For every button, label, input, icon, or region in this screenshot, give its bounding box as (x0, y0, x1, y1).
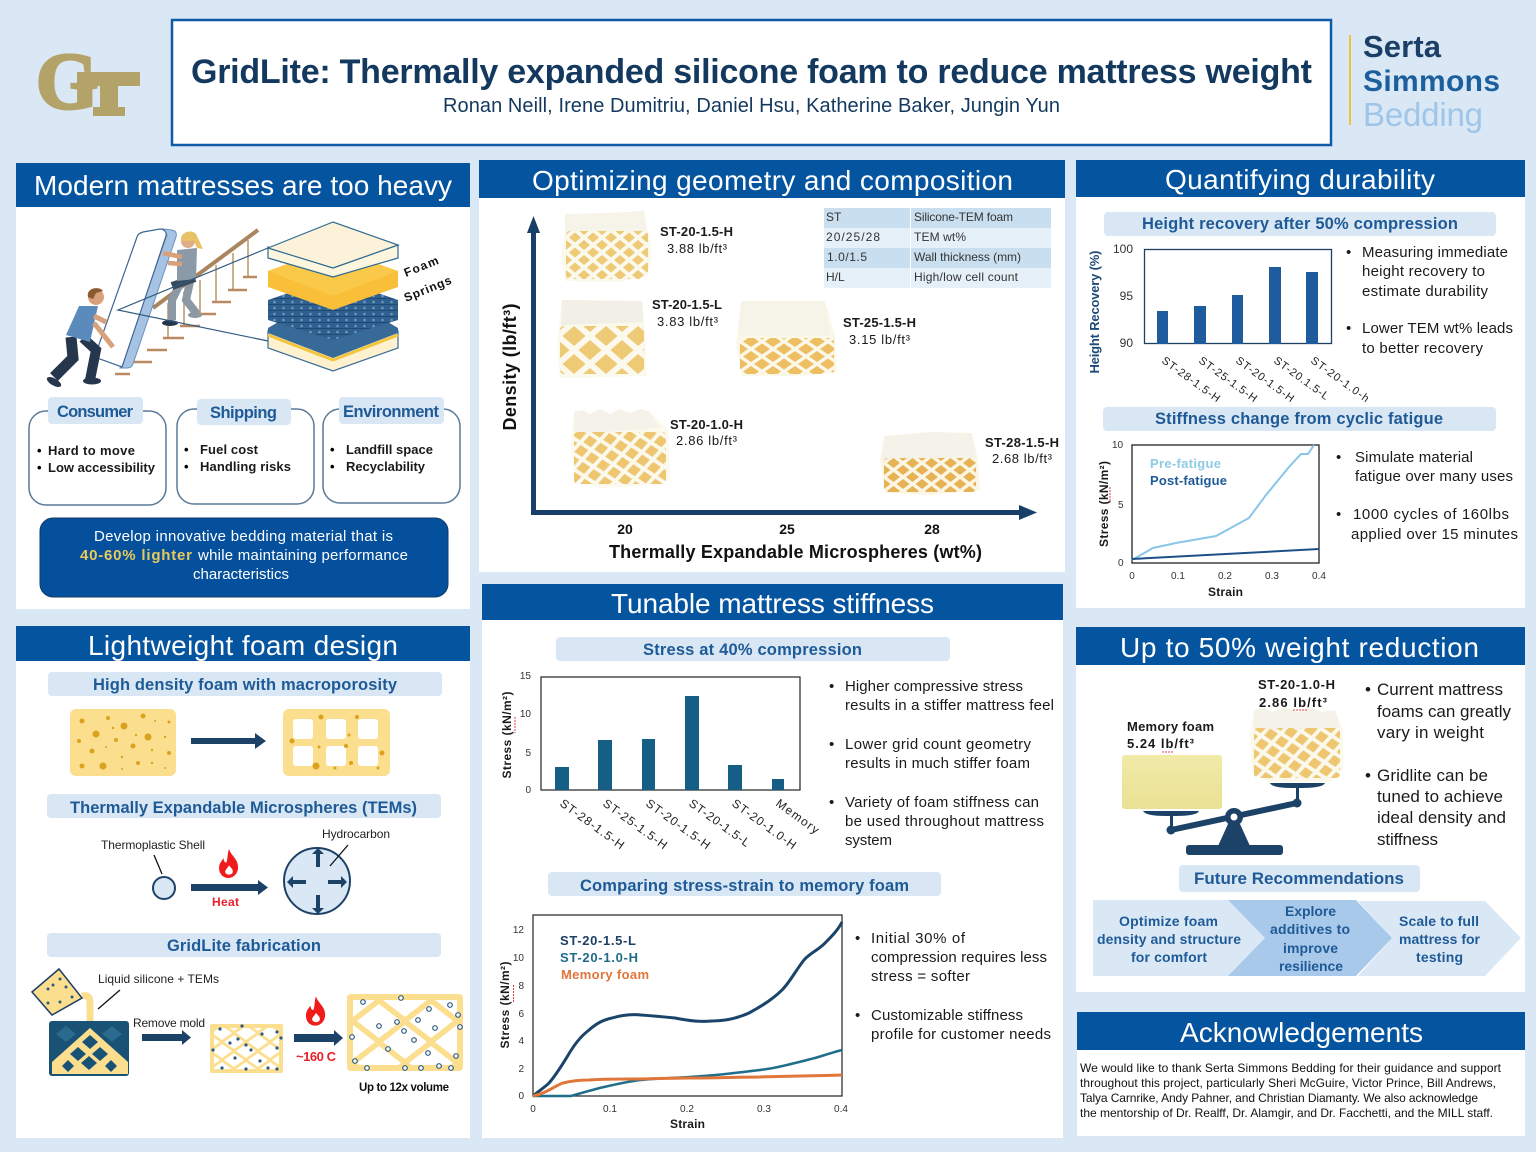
bar chart: stress at 40% compression: ST-20-1.5-H (643, 796, 713, 852)
text: height recovery notes: • (1346, 244, 1351, 261)
line chart: stress-strain: 0 (530, 1104, 536, 1115)
line chart: cyclic fatigue: 0 (1129, 571, 1135, 582)
line chart: stress-strain: 6 (518, 1009, 524, 1020)
text: thanks: We would like to thank Serta Simmons Bedding for their guidance and support (1080, 1061, 1502, 1075)
card: Environment (323, 397, 460, 503)
diagram: microsphere expansion: Thermoplastic Shell (101, 838, 205, 852)
card: Consumer: Low accessibility (48, 460, 156, 475)
text: stress notes: • (829, 794, 834, 811)
sample: ST-20-1.5-H: ST-20-1.5-H (660, 224, 733, 239)
subheading: stress: Stress at 40% compression (643, 641, 862, 659)
line chart: cyclic fatigue: 5 (1118, 500, 1124, 511)
card: Consumer: • (37, 443, 42, 458)
text: cyclic fatigue notes: • (1336, 506, 1341, 523)
card: Shipping: Fuel cost (200, 442, 259, 457)
text: cyclic fatigue notes: fatigue over many uses (1355, 468, 1513, 485)
heading: Lightweight foam design (88, 630, 398, 661)
subheading: cyclic fatigue (1103, 407, 1496, 431)
text: stress-strain notes: profile for customer needs (871, 1026, 1051, 1043)
text: stress notes: • (829, 678, 834, 695)
x axis ticks (617, 521, 940, 537)
bar chart: stress at 40% compression: 5 (525, 748, 531, 759)
sample: ST-28-1.5-H (880, 432, 1059, 495)
line chart: stress-strain: 4 (518, 1036, 524, 1047)
line chart: stress-strain: 10 (513, 953, 524, 964)
diagram: fabrication process: Up to 12x volume (359, 1082, 449, 1094)
step 2: improve (1283, 940, 1338, 956)
text: cyclic fatigue notes: • (1336, 449, 1341, 466)
subheading: stress (556, 637, 950, 661)
sample: ST-20-1.5-L (557, 297, 722, 378)
bar chart: height recovery: 100 (1113, 242, 1133, 256)
card: Shipping: Handling risks (200, 459, 291, 474)
line chart: cyclic fatigue: Post-fatigue (1150, 473, 1227, 488)
line chart: stress-strain: Stress (kN/m²) (498, 962, 512, 1048)
line chart: stress-strain: 12 (513, 925, 524, 936)
step 1: density and structure (1097, 931, 1241, 947)
line chart: cyclic fatigue (1097, 440, 1326, 599)
text: weight notes: vary in weight (1377, 723, 1484, 742)
subheading: TEMs (47, 794, 441, 818)
text: stress notes (829, 678, 1054, 849)
step 3: testing (1416, 949, 1463, 965)
diagram: macroporous foam block (283, 709, 390, 776)
panel: Modern mattresses are too heavy (16, 163, 470, 609)
step 1: Optimize foam (1119, 913, 1218, 929)
table: naming legend: High/low cell count (914, 270, 1019, 284)
subheading: fabrication: GridLite fabrication (167, 937, 321, 955)
card: Environment: • (330, 459, 335, 474)
x axis ticks: 25 (779, 521, 795, 537)
callout: goal (40, 518, 448, 597)
text: weight notes (1365, 680, 1512, 849)
line chart: cyclic fatigue: 0.1 (1171, 571, 1185, 582)
sample: ST-25-1.5-H: ST-25-1.5-H (843, 315, 916, 330)
diagram: balance scale comparison (1122, 677, 1343, 855)
logo: Georgia Tech: G (36, 38, 98, 126)
panel: Tunable mattress stiffness (482, 584, 1063, 1138)
card: Consumer: Hard to move (48, 443, 135, 458)
bar chart: height recovery: ST-20-1.0-h (1308, 355, 1371, 405)
text: stress notes: • (829, 736, 834, 753)
arrow (191, 733, 266, 749)
sample: ST-28-1.5-H: 2.68 lb/ft³ (992, 451, 1053, 466)
panel: Quantifying durability (1076, 160, 1525, 608)
step 1 (1093, 900, 1265, 976)
memory foam block (1122, 755, 1222, 809)
logo: Serta Simmons Bedding: Simmons (1363, 65, 1500, 98)
text: thanks: throughout this project, particularly Sheri McGuire, Victor Prince, Bill Andrews, (1080, 1076, 1496, 1090)
chart axes (527, 216, 1037, 520)
line chart: stress-strain: Strain (670, 1117, 705, 1131)
subheading: macroporosity: High density foam with macroporosity (93, 676, 398, 694)
diagram: balance scale comparison: ST-20-1.0-H (1258, 677, 1335, 692)
bar chart: stress at 40% compression: ST-25-1.5-H (600, 796, 670, 852)
text: stress-strain notes: • (855, 930, 860, 947)
callout: goal: 40-60% lighter (80, 547, 192, 564)
process chevrons (1093, 900, 1521, 976)
woman (162, 232, 203, 326)
woman's arms (163, 253, 182, 264)
bar chart: height recovery: ST-20.1.5-L (1271, 355, 1331, 403)
y axis label: Density (lb/ft³) (500, 304, 520, 430)
diagram: fabrication process: Remove mold (133, 1016, 205, 1030)
subheading: future recommendations: Future Recommendations (1194, 869, 1404, 888)
step 2: additives to (1270, 921, 1350, 937)
line chart: cyclic fatigue: 0 (1118, 558, 1124, 569)
text: height recovery notes: height recovery to (1362, 263, 1485, 280)
text: stress notes: results in a stiffer mattress feel (845, 697, 1054, 714)
subheading: fabrication (47, 933, 441, 957)
step 3 (1358, 901, 1521, 976)
subheading: macroporosity (48, 672, 442, 696)
line chart: cyclic fatigue: 0.2 (1218, 571, 1232, 582)
man (45, 288, 113, 389)
card: Environment: Environment (343, 403, 440, 421)
bar chart: height recovery: ST-20-1.5-H (1233, 355, 1296, 405)
step 2: resilience (1279, 958, 1343, 974)
diagram: microsphere expansion (101, 827, 390, 914)
subheading: height recovery (1104, 212, 1496, 236)
panel: Lightweight foam design (16, 626, 470, 1138)
bar chart: height recovery: 90 (1120, 336, 1133, 350)
label: foam: Foam (402, 253, 441, 280)
step 1: for comfort (1131, 949, 1207, 965)
title: GridLite: Thermally expanded silicone foam to reduce mattress weight (191, 53, 1312, 91)
bar chart: stress at 40% compression (500, 671, 822, 852)
callout: goal: characteristics (193, 566, 289, 583)
diagram: fabrication process: Liquid silicone + TEMs (98, 972, 219, 986)
sample: ST-20-1.0-H (571, 409, 743, 488)
heading: Up to 50% weight reduction (1120, 632, 1479, 663)
line chart: cyclic fatigue: 0.4 (1312, 571, 1326, 582)
subheading: height recovery: Height recovery after 50% compression (1142, 215, 1458, 233)
line chart: stress-strain: 0.3 (757, 1104, 771, 1115)
bar chart: stress at 40% compression: ST-20-1.0-H (729, 796, 799, 852)
text: height recovery notes: estimate durability (1362, 283, 1488, 300)
heading: Modern mattresses are too heavy (34, 170, 452, 201)
line chart: cyclic fatigue: Stress (kN/m²) (1097, 461, 1111, 547)
line chart: stress-strain (498, 915, 848, 1131)
line chart: stress-strain: 0.2 (680, 1104, 694, 1115)
line chart: stress-strain: 2 (518, 1064, 524, 1075)
text: stress notes: be used throughout mattress (845, 813, 1044, 830)
bar chart: height recovery: ST-28-1.5-H (1159, 355, 1222, 405)
card: Consumer (29, 397, 166, 505)
diagram: microsphere expansion: Hydrocarbon (322, 827, 390, 841)
illustration: mattress layers (268, 222, 454, 371)
callout: goal: while maintaining performance (197, 547, 408, 564)
heading: Optimizing geometry and composition (532, 165, 1013, 196)
icon: flame (219, 849, 238, 878)
x axis label: Thermally Expandable Microspheres (wt%) (609, 542, 982, 562)
card: Consumer: • (37, 460, 42, 475)
text: weight notes: stiffness (1377, 830, 1438, 849)
text: thanks (1080, 1061, 1502, 1120)
icon: flame (306, 996, 325, 1026)
line chart: stress-strain: ST-20-1.0-H (560, 950, 638, 965)
text: weight notes: foams can greatly (1377, 702, 1512, 721)
line chart: stress-strain: 0 (518, 1091, 524, 1102)
text: thanks: Talya Carnrike, Andy Pahner, and Christian Diamanty. We also acknowledge (1080, 1091, 1478, 1105)
table: naming legend: 1.0/1.5 (827, 250, 867, 264)
logo: Serta Simmons Bedding: Bedding (1363, 96, 1483, 133)
logo: Georgia Tech (36, 38, 140, 126)
text: stress notes: system (845, 832, 892, 849)
title block (172, 20, 1331, 145)
text: weight notes: Gridlite can be (1377, 766, 1488, 785)
step 2: Explore (1285, 903, 1336, 919)
card: Environment: • (330, 442, 335, 457)
diagram: dense foam block (70, 709, 176, 776)
callout: goal: Develop innovative bedding material that is (94, 528, 393, 545)
panel: Up to 50% weight reduction (1076, 627, 1525, 992)
line chart: stress-strain: ST-20-1.5-L (560, 933, 636, 948)
text: stress notes: results in much stiffer foam (845, 755, 1030, 772)
sample: ST-25-1.5-H (736, 301, 916, 376)
bar chart: height recovery: 95 (1120, 289, 1133, 303)
text: stress-strain notes: compression requires less (871, 949, 1047, 966)
step 2 (1228, 900, 1392, 976)
text: height recovery notes: • (1346, 320, 1351, 337)
panel: Acknowledgements (1077, 1012, 1525, 1136)
bar chart: stress at 40% compression: 10 (520, 709, 531, 720)
card: Environment: Recyclability (346, 459, 426, 474)
subheading: TEMs: Thermally Expandable Microspheres (TEMs) (70, 799, 417, 817)
table: naming legend: H/L (826, 270, 845, 284)
text: stress notes: Higher compressive stress (845, 678, 1023, 695)
table: naming legend (824, 208, 1051, 288)
mattress being carried (95, 229, 176, 368)
mold and pour (32, 969, 129, 1076)
heading: Tunable mattress stiffness (611, 588, 934, 619)
text: weight notes: • (1365, 766, 1371, 785)
diagram: balance scale comparison: 2.86 lb/ft³ (1259, 695, 1328, 710)
text: cyclic fatigue notes: applied over 15 minutes (1351, 526, 1518, 543)
table: naming legend: Silicone-TEM foam (914, 210, 1013, 224)
text: stress-strain notes (855, 930, 1051, 1043)
text: stress-strain notes: • (855, 1007, 860, 1024)
diagram: balance scale comparison: 5.24 lb/ft³ (1127, 736, 1195, 751)
text: cyclic fatigue notes (1336, 449, 1518, 543)
bar chart: stress at 40% compression: Stress (kN/m²) (500, 692, 514, 778)
line chart: cyclic fatigue: Pre-fatigue (1150, 456, 1221, 471)
subheading: stress-strain (548, 872, 941, 896)
line chart: stress-strain: Memory foam (561, 967, 649, 982)
line chart: stress-strain: 8 (518, 981, 524, 992)
line chart: stress-strain: 0.4 (834, 1104, 848, 1115)
sample: ST-20-1.5-L: 3.83 lb/ft³ (657, 314, 719, 329)
table: naming legend: TEM wt% (914, 230, 966, 244)
text: thanks: the mentorship of Dr. Realff, Dr. Alamgir, and Dr. Facchetti, and the MILL staff. (1080, 1106, 1493, 1120)
step 3: mattress for (1399, 931, 1481, 947)
diagram: microsphere expansion: Heat (212, 895, 239, 909)
card: Consumer: Consumer (57, 403, 134, 421)
text: height recovery notes: Measuring immediate (1362, 244, 1508, 261)
bar chart: stress at 40% compression: 15 (520, 671, 531, 682)
lattice sample (1250, 707, 1343, 782)
text: cyclic fatigue notes: 1000 cycles of 160lbs (1353, 506, 1509, 523)
sample: ST-20-1.5-H: 3.88 lb/ft³ (667, 241, 728, 256)
logo: Serta Simmons Bedding (1349, 29, 1500, 133)
text: weight notes: tuned to achieve (1377, 787, 1503, 806)
sample: ST-20-1.5-H (561, 211, 733, 282)
line chart: stress-strain: 0.1 (603, 1104, 617, 1115)
table: naming legend: 20/25/28 (826, 230, 880, 244)
text: stress notes: Variety of foam stiffness can (845, 794, 1039, 811)
subheading: future recommendations (1179, 865, 1420, 892)
line chart: cyclic fatigue: 0.3 (1265, 571, 1279, 582)
text: weight notes: Current mattress (1377, 680, 1503, 699)
text: height recovery notes: Lower TEM wt% leads (1362, 320, 1513, 337)
sample: ST-20-1.0-H: ST-20-1.0-H (670, 417, 743, 432)
line chart: cyclic fatigue: Strain (1208, 585, 1243, 599)
bar chart: stress at 40% compression: Memory (773, 796, 822, 837)
logo: Serta Simmons Bedding: Serta (1363, 29, 1442, 64)
sample: ST-28-1.5-H: ST-28-1.5-H (985, 435, 1059, 450)
diagram: fabrication process (32, 969, 463, 1094)
label: springs: Springs (402, 273, 454, 305)
illustration: couple carrying mattress upstairs (45, 229, 268, 389)
card: Shipping (177, 399, 314, 504)
bar chart: stress at 40% compression: ST-20-1.5-L (686, 796, 753, 850)
text: cyclic fatigue notes: Simulate material (1355, 449, 1473, 466)
authors: Ronan Neill, Irene Dumitriu, Daniel Hsu, Katherine Baker, Jungin Yun (443, 95, 1060, 117)
sample: ST-25-1.5-H: 3.15 lb/ft³ (849, 332, 911, 347)
x axis ticks: 20 (617, 521, 633, 537)
card: Shipping: Shipping (210, 404, 277, 422)
text: stress notes: Lower grid count geometry (845, 736, 1032, 753)
card: Shipping: • (184, 442, 189, 457)
scale (1143, 783, 1325, 855)
text: stress-strain notes: stress = softer (871, 968, 970, 985)
step 3: Scale to full (1399, 913, 1479, 929)
bar chart: stress at 40% compression: ST-28-1.5-H (557, 796, 627, 852)
sample: ST-20-1.5-L: ST-20-1.5-L (652, 297, 722, 312)
text: height recovery notes: to better recovery (1362, 340, 1484, 357)
sample: ST-20-1.0-H: 2.86 lb/ft³ (676, 433, 738, 448)
table: naming legend: ST (826, 210, 842, 224)
card: Shipping: • (184, 459, 189, 474)
expanded lattice (347, 994, 463, 1071)
heading: Acknowledgements (1180, 1017, 1423, 1048)
text: stress-strain notes: Customizable stiffness (871, 1007, 1023, 1024)
line chart: cyclic fatigue: 10 (1112, 440, 1124, 451)
text: weight notes: • (1365, 680, 1371, 699)
heading: Quantifying durability (1165, 164, 1435, 195)
bar chart: height recovery (1087, 242, 1371, 405)
text: height recovery notes (1346, 244, 1513, 357)
label: memory foam: Memory foam (1127, 719, 1214, 734)
card: Environment: Landfill space (346, 442, 433, 457)
bar chart: height recovery: ST-25-1.5-H (1196, 355, 1259, 405)
bar chart: stress at 40% compression: 0 (525, 785, 531, 796)
text: weight notes: ideal density and (1377, 808, 1506, 827)
panel: Optimizing geometry and composition (479, 160, 1065, 572)
small lattice (210, 1024, 283, 1073)
diagram: fabrication process: ~160 C (296, 1049, 337, 1064)
x axis ticks: 28 (924, 521, 940, 537)
bar chart: height recovery: Height Recovery (%) (1087, 250, 1102, 374)
table: naming legend: Wall thickness (mm) (914, 250, 1021, 264)
subheading: stress-strain: Comparing stress-strain to memory foam (580, 877, 909, 895)
text: stress-strain notes: Initial 30% of (871, 930, 966, 947)
subheading: cyclic fatigue: Stiffness change from cyclic fatigue (1155, 410, 1443, 428)
